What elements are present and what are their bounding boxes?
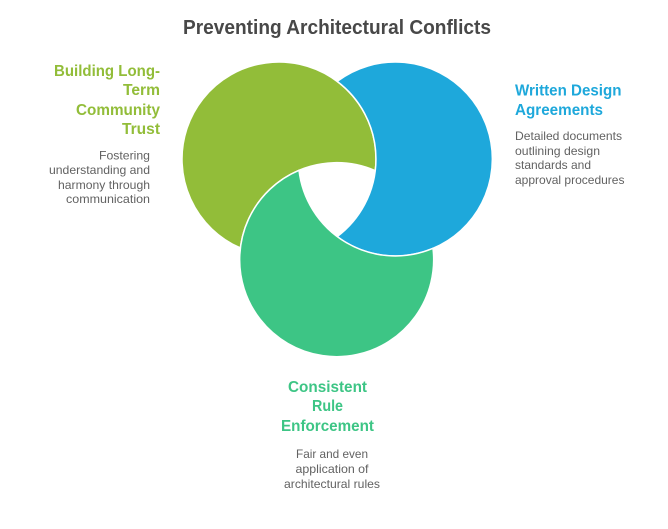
- description: building long-term community trust: communication: [66, 192, 150, 206]
- description: written design agreements: [515, 129, 624, 187]
- text block: written design agreements: [515, 82, 624, 187]
- description: written design agreements: standards and: [515, 158, 591, 172]
- heading: building long-term community trust: Community: [76, 102, 160, 119]
- description: building long-term community trust: Fostering: [99, 148, 150, 162]
- text block: building long-term community trust: [49, 63, 160, 206]
- heading: written design agreements: [515, 82, 622, 119]
- description: consistent rule enforcement: architectural rules: [284, 477, 380, 491]
- heading: consistent rule enforcement: Rule: [312, 398, 343, 415]
- heading: consistent rule enforcement: Consistent: [288, 379, 367, 396]
- circle segment: building long-term community trust: [182, 62, 376, 248]
- interlocking three-circle diagram: [182, 62, 492, 357]
- heading: building long-term community trust: Term: [123, 82, 160, 99]
- heading: building long-term community trust: [54, 63, 160, 138]
- description: consistent rule enforcement: application of: [296, 462, 369, 476]
- description: written design agreements: Detailed documents: [515, 129, 622, 143]
- description: building long-term community trust: [49, 148, 150, 206]
- heading: written design agreements: Agreements: [515, 102, 603, 119]
- heading: consistent rule enforcement: [281, 379, 374, 435]
- description: written design agreements: outlining design: [515, 144, 600, 158]
- description: written design agreements: approval procedures: [515, 173, 624, 187]
- description: consistent rule enforcement: [284, 447, 380, 491]
- circle segment: written design agreements: [337, 62, 492, 256]
- heading: written design agreements: Written Design: [515, 82, 622, 100]
- description: consistent rule enforcement: Fair and even: [296, 447, 368, 461]
- description: building long-term community trust: harmony through: [58, 178, 150, 192]
- title: Preventing Architectural Conflicts: [183, 17, 491, 39]
- text block: consistent rule enforcement: [281, 379, 380, 491]
- description: building long-term community trust: understanding and: [49, 163, 150, 177]
- heading: consistent rule enforcement: Enforcement: [281, 418, 374, 435]
- heading: building long-term community trust: Trust: [122, 121, 160, 138]
- circle segment: consistent rule enforcement: [240, 170, 434, 357]
- heading: building long-term community trust: Building Long-: [54, 63, 160, 80]
